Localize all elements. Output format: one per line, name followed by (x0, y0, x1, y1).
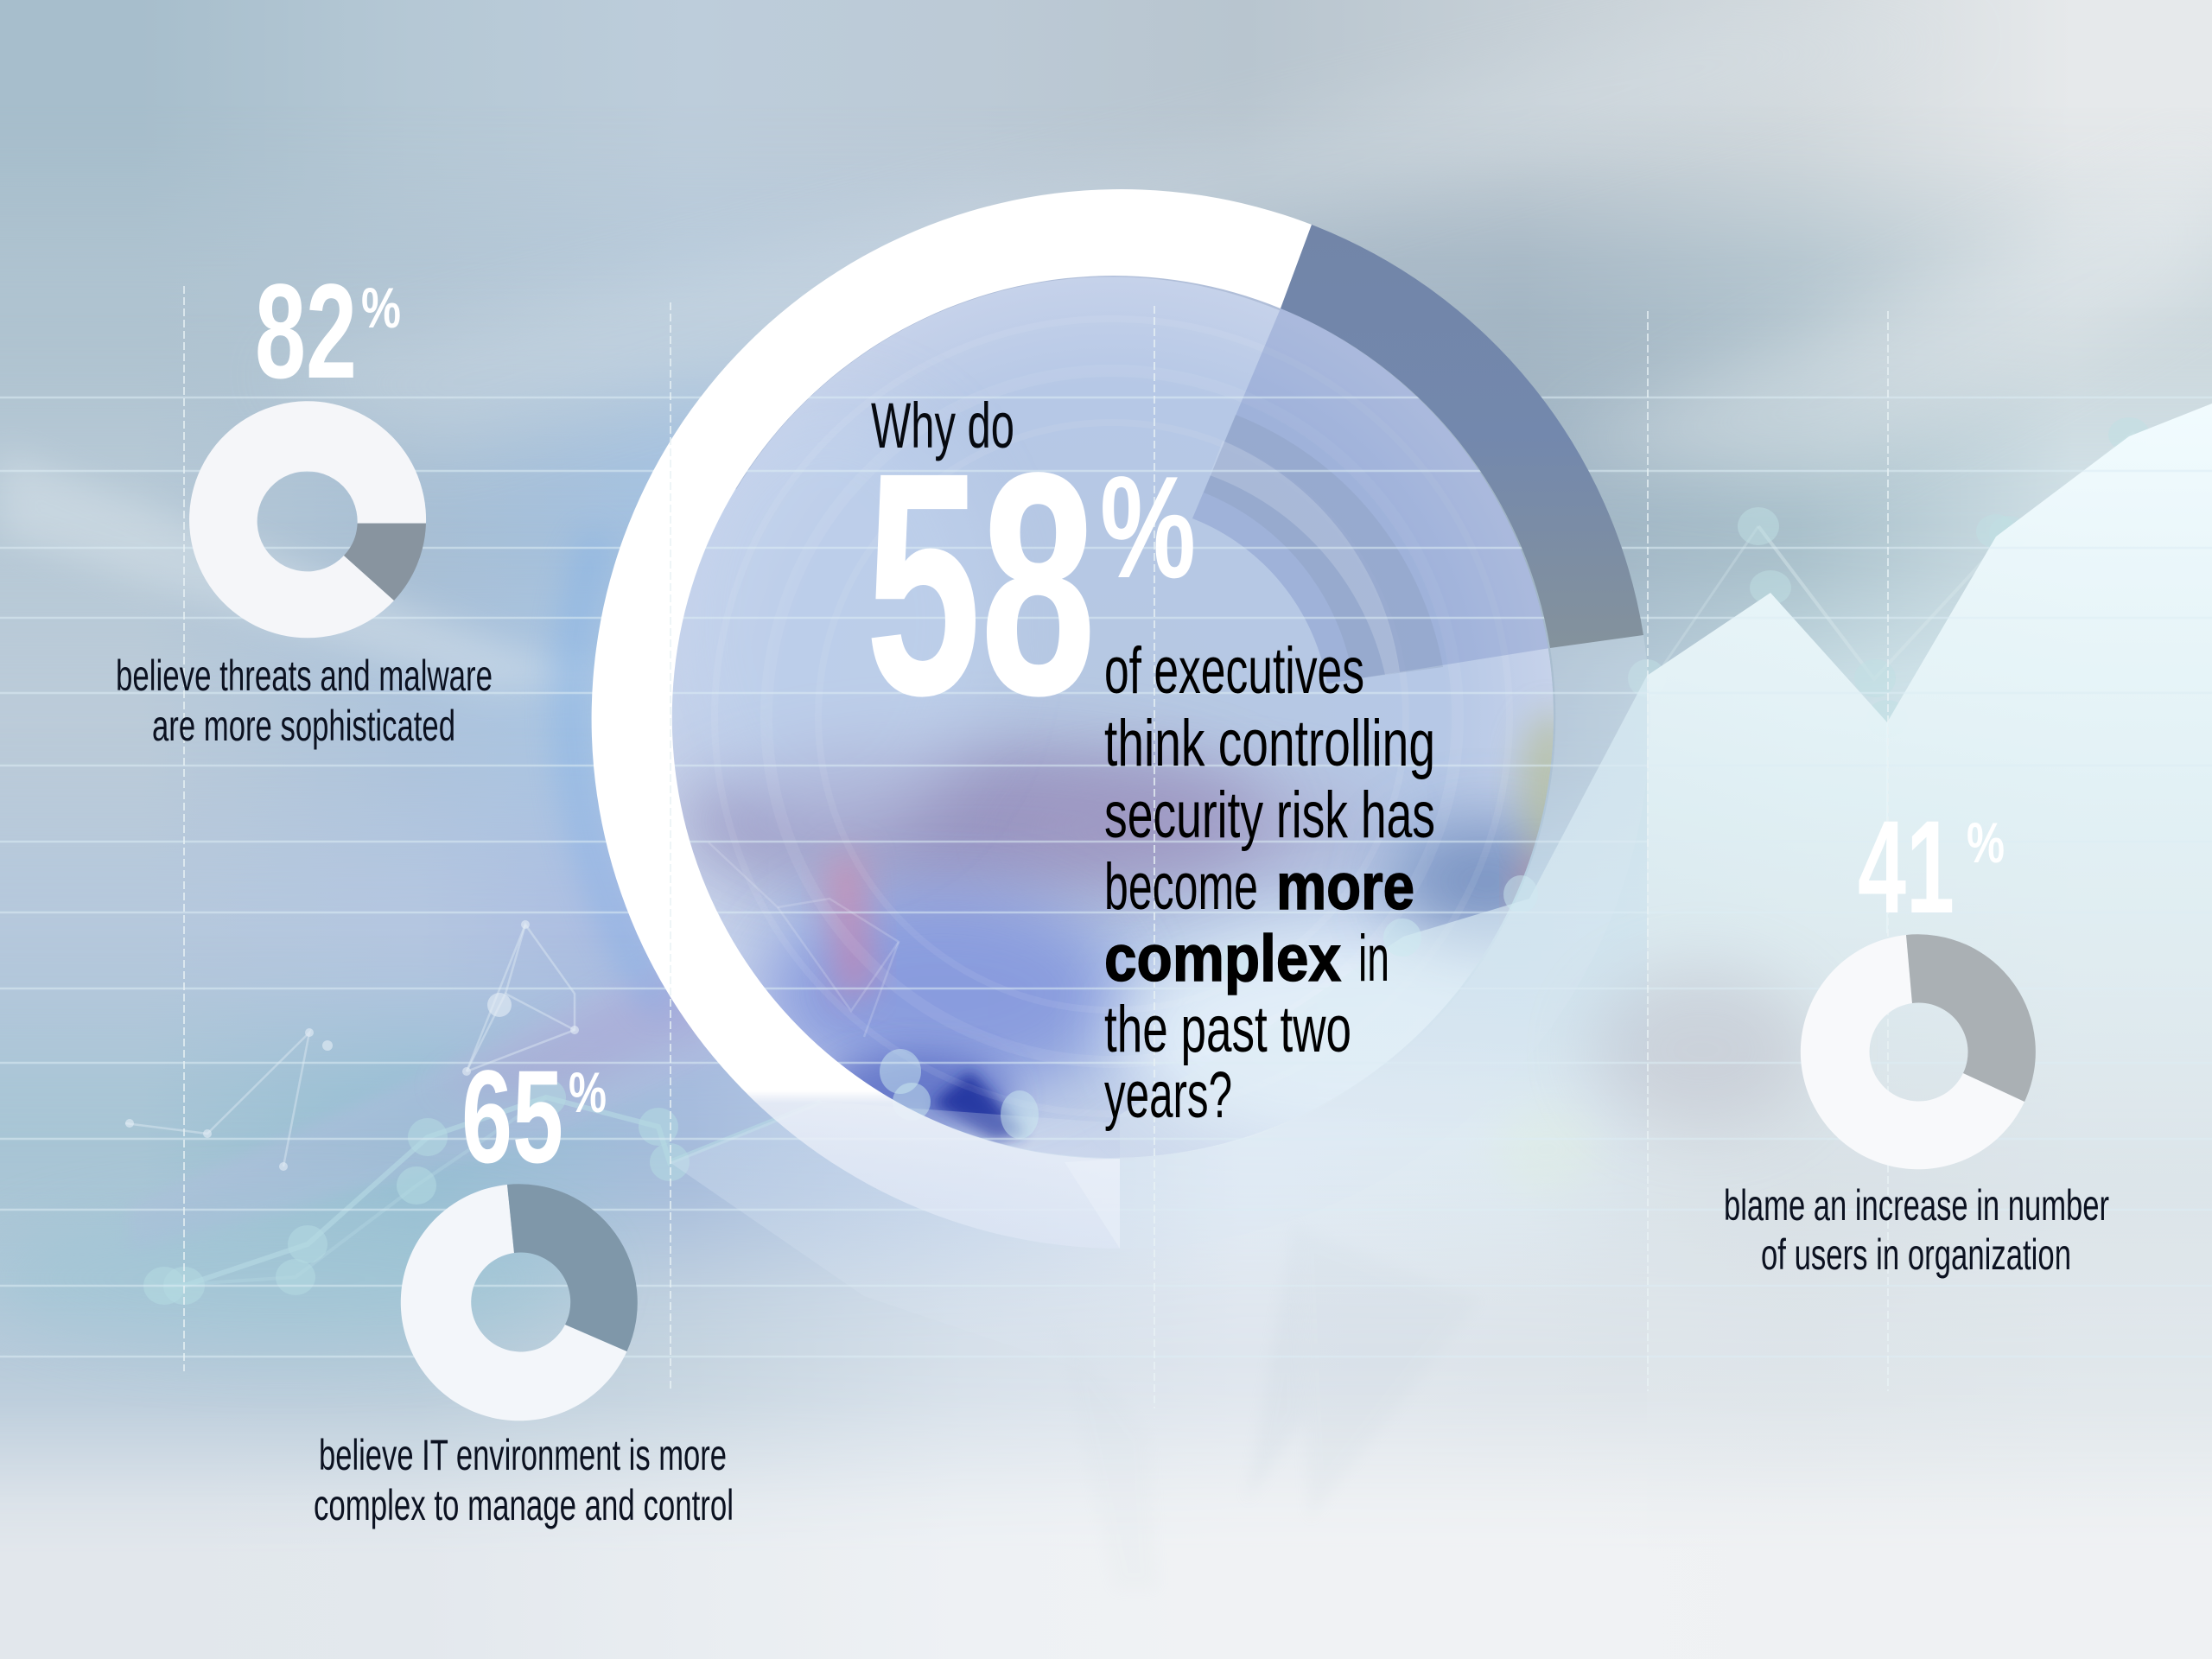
donut chart: 41% (1801, 934, 2036, 1169)
central statement text: more (1276, 850, 1414, 924)
number: 41%: % (1967, 810, 2005, 874)
stat: 82 percent (116, 257, 493, 750)
horizontal grid lines (0, 397, 2212, 1357)
number: 65%: % (569, 1060, 607, 1124)
label: threats and malware: believe threats and malware (116, 652, 493, 700)
donut chart: 82% (189, 401, 426, 638)
central statement text: in (1358, 922, 1389, 995)
central ring: grey arc segment (1281, 225, 1643, 648)
stat: 41 percent (1724, 793, 2109, 1279)
number: 41%: 41 (1858, 793, 1955, 941)
central statement text (1104, 634, 1435, 1132)
label: IT environment (314, 1431, 734, 1529)
number: 82%: 82 (255, 257, 357, 407)
central statement text: become (1104, 850, 1258, 924)
glow behind central ring (570, 536, 665, 1011)
label: IT environment: complex to manage and control (314, 1481, 734, 1529)
donut chart: 65% (401, 1184, 638, 1421)
label: threats and malware: are more sophisticated (152, 702, 455, 750)
central statement text: of executives (1104, 634, 1364, 708)
vertical dashed grid lines (184, 286, 1888, 1408)
central statement text: security risk has (1104, 779, 1435, 852)
light area chart, right (670, 404, 2212, 1555)
label: IT environment: believe IT environment is more (319, 1431, 727, 1479)
heading: Why do: Why do (871, 390, 1014, 461)
big number: 58%: 58 (866, 409, 1096, 760)
faint continuation of the ring on the lower right (1120, 635, 1650, 1249)
central statement text: think controlling (1104, 707, 1435, 780)
central statement text: years? (1104, 1058, 1232, 1132)
label: increase in users (1724, 1181, 2109, 1279)
inner disk with abstract colours (665, 275, 1581, 1158)
stat: 65 percent (314, 1043, 734, 1529)
background network and line graph, lower left (125, 920, 821, 1305)
central statement text: the past two (1104, 993, 1351, 1066)
central statement text: complex (1104, 922, 1341, 995)
central ring: white arc segment (592, 189, 1312, 1249)
number: 82%: % (361, 276, 401, 340)
wedge inside disk (1192, 308, 1550, 683)
number: 65%: 65 (461, 1043, 563, 1191)
big number: 58%: % (1100, 446, 1196, 608)
label: increase in users: of users in organization (1761, 1230, 2071, 1279)
label: threats and malware (116, 652, 493, 750)
central ring: light tip at the end of the arc (1065, 1159, 1120, 1249)
